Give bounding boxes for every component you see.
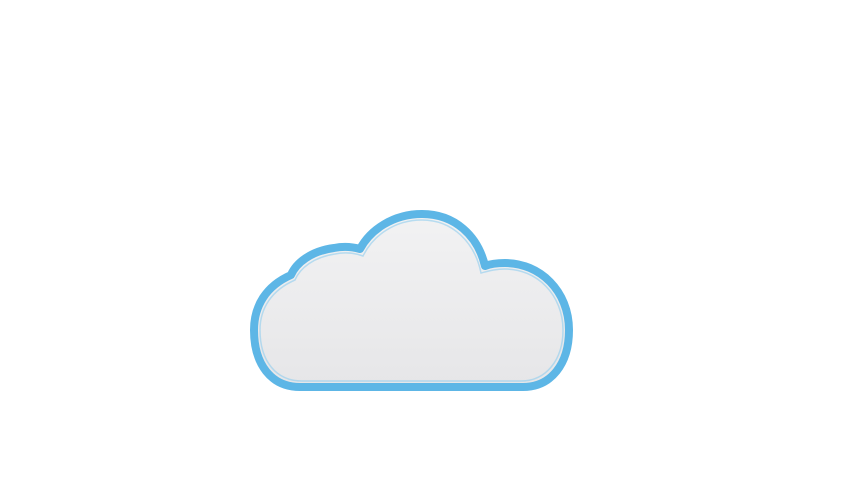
cloud shape [254,214,569,387]
